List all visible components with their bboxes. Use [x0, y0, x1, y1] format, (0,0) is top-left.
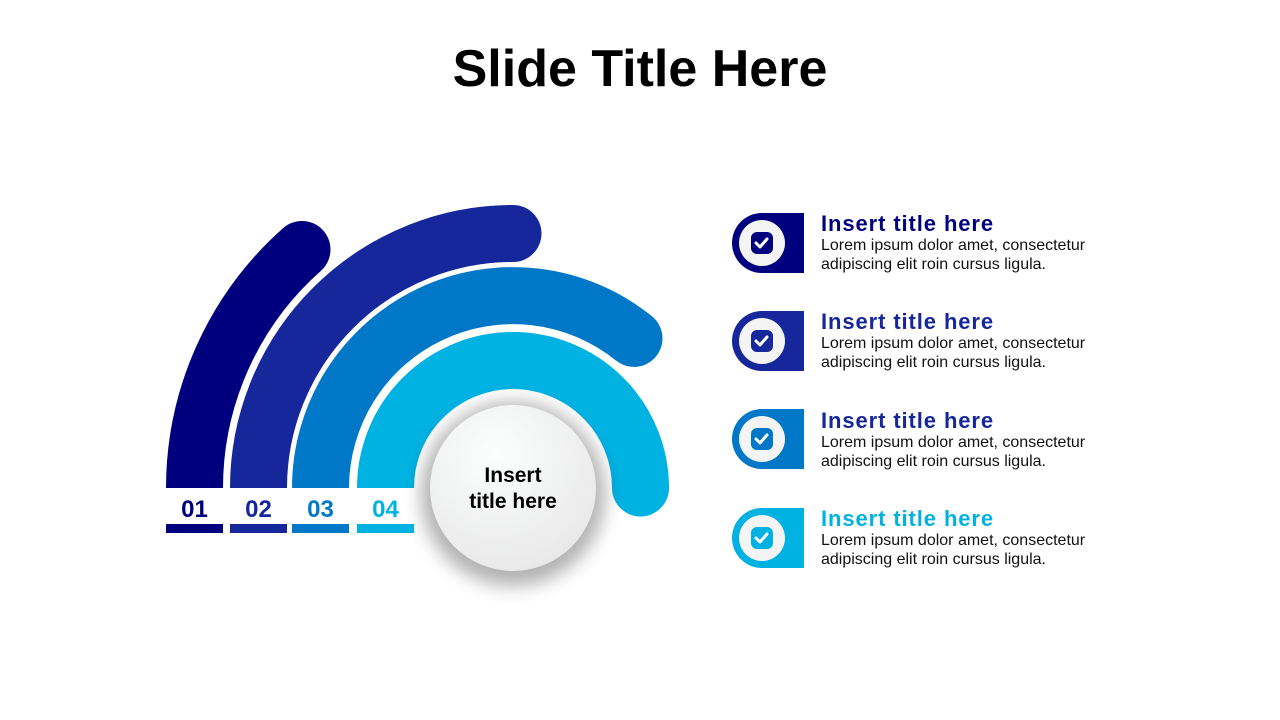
item 2 text: Lorem ipsum dolor amet, consectetur [821, 335, 1085, 352]
item 4 text: Insert title here [821, 506, 994, 531]
item 2 text: adipiscing elit roin cursus ligula. [821, 354, 1046, 371]
item 4 text: adipiscing elit roin cursus ligula. [821, 551, 1046, 568]
item 1 text [821, 211, 1085, 273]
title: Slide Title Here [453, 40, 827, 98]
icon 4 [732, 508, 804, 568]
item 3 text [821, 408, 1085, 470]
icon 1 [732, 213, 804, 273]
number labels: 04 [372, 496, 399, 523]
item 3 text: Insert title here [821, 408, 994, 433]
item 3 text: Lorem ipsum dolor amet, consectetur [821, 434, 1085, 451]
item 2 text [821, 309, 1085, 371]
center circle: title here [469, 490, 557, 513]
item 3 text: adipiscing elit roin cursus ligula. [821, 453, 1046, 470]
center circle [421, 402, 605, 586]
arc 3 [320, 296, 662, 488]
item 2 text: Insert title here [821, 309, 994, 334]
item 4 text [821, 506, 1085, 568]
arc 4 [386, 360, 669, 516]
number labels: 03 [307, 496, 334, 523]
item 4 text: Lorem ipsum dolor amet, consectetur [821, 532, 1085, 549]
item 1 text: adipiscing elit roin cursus ligula. [821, 256, 1046, 273]
center circle: Insert [484, 464, 542, 487]
arc 2 [258, 205, 542, 488]
number labels: 01 [181, 496, 208, 523]
arc 1 [194, 221, 330, 488]
icon 2 [732, 311, 804, 371]
number labels [166, 496, 414, 533]
number labels: 02 [245, 496, 272, 523]
item 1 text: Insert title here [821, 211, 994, 236]
item 1 text: Lorem ipsum dolor amet, consectetur [821, 237, 1085, 254]
icon 3 [732, 409, 804, 469]
